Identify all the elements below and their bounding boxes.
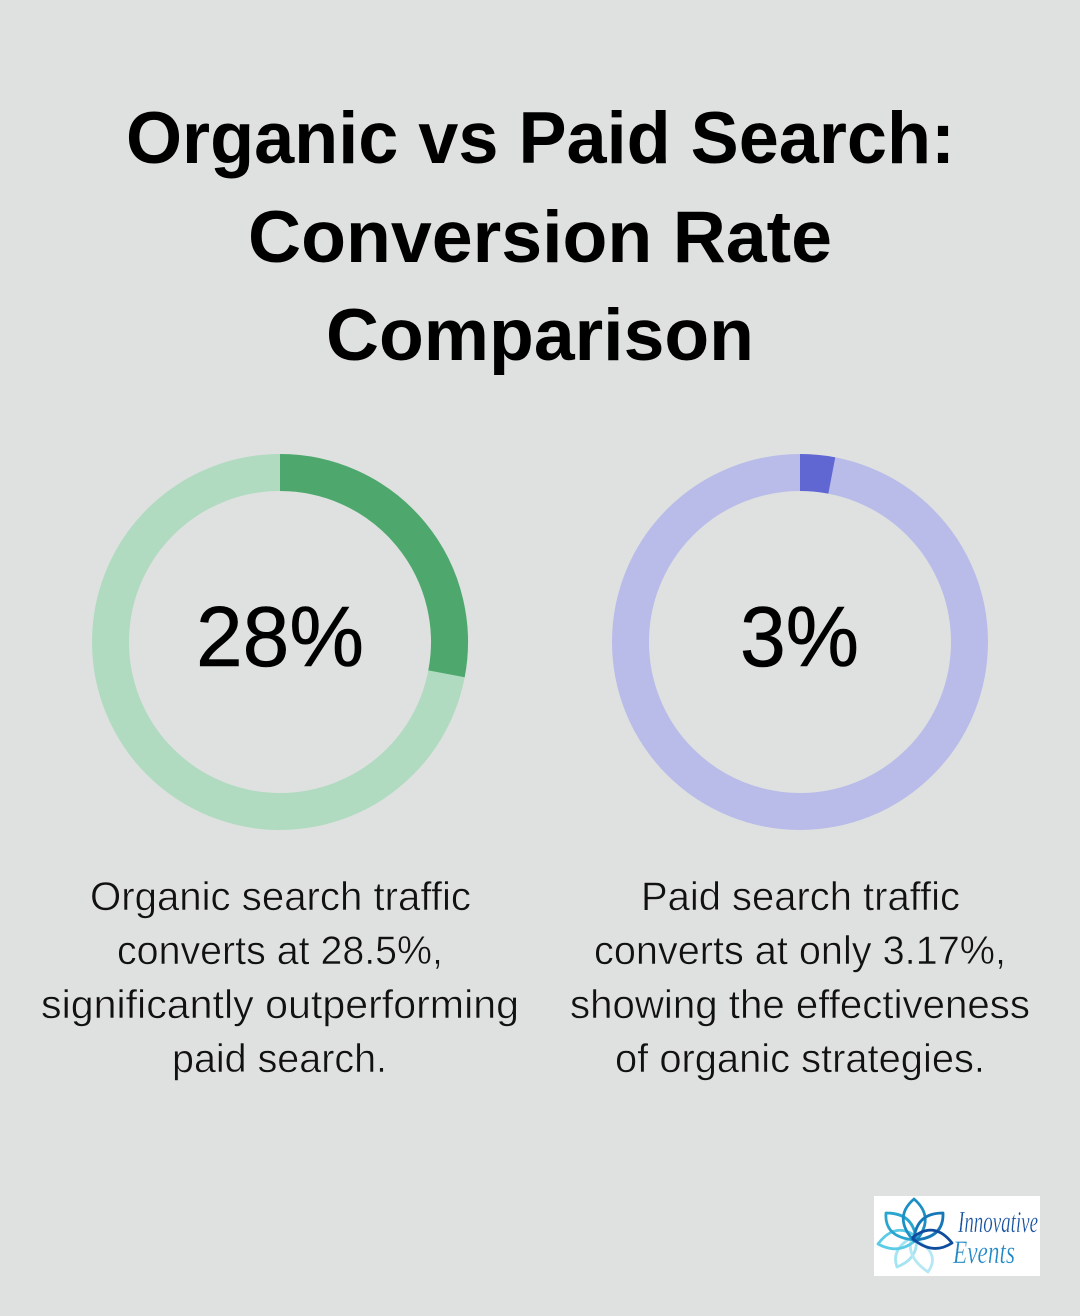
- text block: organic description: significantly outperforming: [41, 983, 519, 1027]
- title: Conversion Rate: [248, 197, 832, 278]
- text block: paid description: of organic strategies.: [615, 1037, 985, 1081]
- text block: paid description: Paid search traffic: [641, 875, 960, 919]
- wordmark: [952, 1204, 1038, 1271]
- donut chart: organic 28%: [110, 472, 450, 812]
- stat: 28%: 28%: [196, 590, 364, 685]
- icon: flower: [878, 1199, 952, 1272]
- panel: paid search: [570, 472, 1030, 1081]
- title: [126, 98, 955, 376]
- stat: 3%: 3%: [740, 590, 859, 685]
- logo: Innovative Events: [874, 1196, 1040, 1276]
- text block: paid description: showing the effectiveness: [570, 983, 1030, 1027]
- text block: organic description: converts at 28.5%,: [117, 929, 443, 973]
- wordmark: Events: [952, 1235, 1015, 1271]
- text block: organic description: [41, 875, 519, 1081]
- title: Organic vs Paid Search:: [126, 98, 955, 179]
- text block: paid description: converts at only 3.17%,: [594, 929, 1006, 973]
- text block: organic description: paid search.: [172, 1037, 387, 1081]
- title: Comparison: [326, 295, 754, 376]
- donut chart: paid 3%: [630, 472, 970, 812]
- panel: organic search: [41, 472, 519, 1081]
- text block: paid description: [570, 875, 1030, 1081]
- text block: organic description: Organic search traffic: [90, 875, 471, 919]
